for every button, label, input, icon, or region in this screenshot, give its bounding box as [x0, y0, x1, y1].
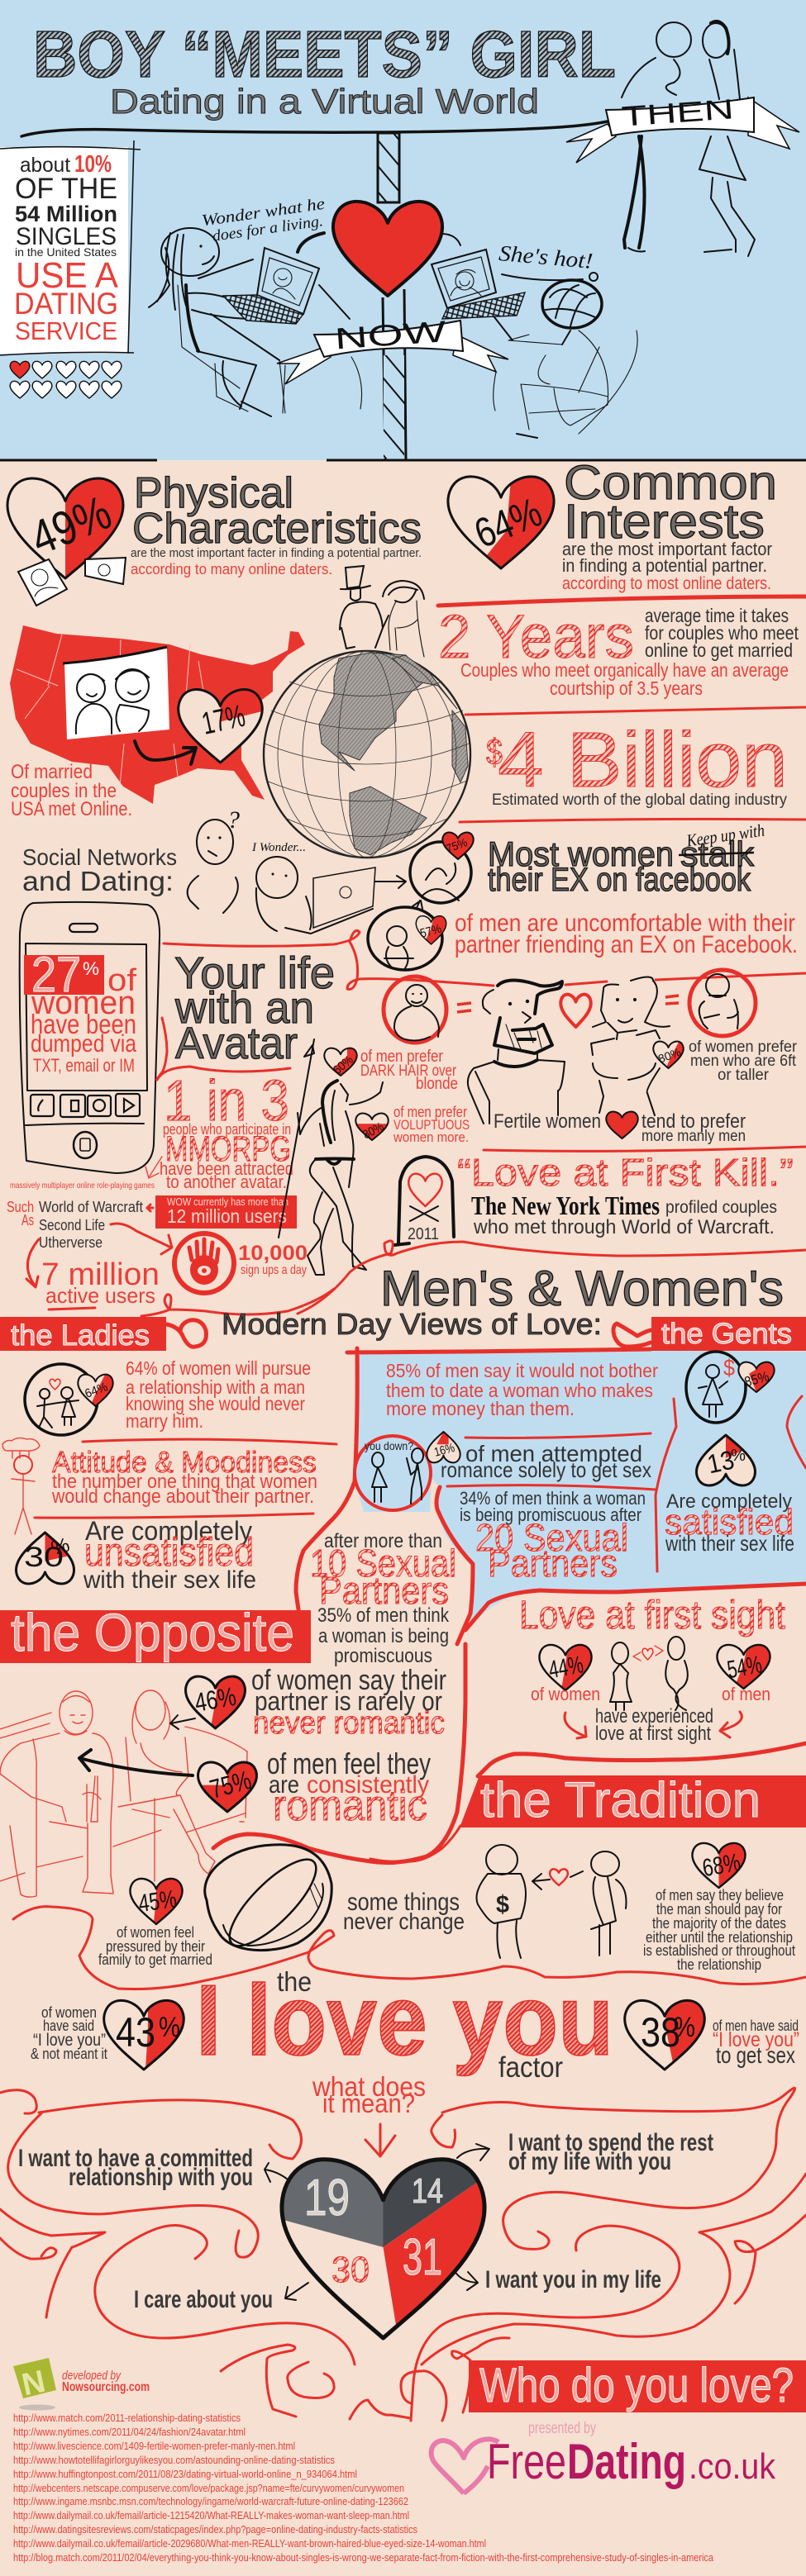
photo: couple [63, 647, 169, 739]
stat: 43 percent women said I love you: 43 [116, 2009, 155, 2056]
stat: 45 percent family pressure: pressured by their [106, 1938, 205, 1955]
stat: 27 percent dumped: TXT, email or IM [33, 1055, 135, 1076]
heading: your life with an avatar: Avatar [175, 1019, 298, 1068]
stat: 43 percent women said I love you [31, 1996, 193, 2070]
panel: header blue sky [0, 0, 806, 460]
stat: 1 in 3 MMORPG: 1 in 3 [164, 1068, 289, 1133]
panel: gents blue area [355, 1350, 806, 1628]
stat: women unsatisfied 30 percent: unsatisfied [84, 1531, 254, 1575]
illustration: bearded man [468, 980, 565, 1124]
illustration: warrior avatar woman [279, 1039, 383, 1275]
list: virtual worlds: Such [7, 1199, 34, 1215]
stat: 75 percent consistently romantic: are [269, 1771, 299, 1799]
banner: NOW: NOW [333, 314, 447, 355]
stat: men date richer women [386, 1360, 658, 1419]
stat: 46 percent never romantic: 46% [193, 1681, 238, 1718]
stat: 1 in 3 MMORPG [10, 1068, 293, 1192]
text: married couples: couples in the [11, 780, 117, 802]
stat: 80 percent voluptuous: of men prefer [393, 1104, 467, 1120]
stat: 27 percent dumped: 27 [31, 947, 81, 1002]
list: virtual worlds: World of Warcraft [39, 1199, 143, 1215]
logo: Nowsourcing: developed by [62, 2369, 122, 2383]
chart: what I love you means heart: 14 [412, 2171, 443, 2210]
text: fertile women [494, 1110, 746, 1145]
stat: 10 sexual partners: a woman is being [318, 1625, 449, 1647]
list: sources: http://webcenters.netscape.compuserve.com/love/package.jsp?name=fte/curvywomen/curvywomen [13, 2482, 404, 2494]
stat: common interests 64 percent heart [446, 475, 556, 570]
panel: 10 percent stat: OF THE [15, 173, 117, 205]
decorative curves [213, 1644, 465, 1863]
text: attempted romance [441, 1441, 651, 1482]
subtitle: Dating in a Virtual World [110, 82, 539, 121]
headline: love at first kill: “Love at First Kill.” [457, 1151, 794, 1194]
arrow: second life to hand [111, 1224, 172, 1254]
text: attempted romance: of men attempted [465, 1441, 642, 1466]
section: love at first sight: have experienced [595, 1705, 713, 1728]
logo: FreeDating.co.uk [432, 2420, 776, 2493]
stat: 27 percent dumped [24, 947, 136, 1076]
stat: 1 in 3 MMORPG: have been attracted [160, 1158, 293, 1179]
title: BOY “MEETS” GIRL [33, 17, 616, 91]
stat: 27 percent dumped: dumped via [31, 1030, 136, 1057]
stat: women unsatisfied 30 percent: with their sex life [83, 1566, 256, 1594]
stat: women unsatisfied 30 percent [15, 1520, 255, 1588]
arrow: down to heart [365, 2124, 395, 2156]
chart: what I love you means heart: 31 [403, 2229, 442, 2286]
heading: the I love you factor: the [277, 1966, 312, 1997]
icon: second life hand [174, 1233, 234, 1293]
text: new york times [471, 1191, 777, 1238]
panel: 10 percent stat: about [20, 154, 70, 177]
heading: physical characteristics: are the most important facter in finding a potential partner. [131, 547, 422, 560]
logo: FreeDating.co.uk: Free [487, 2434, 566, 2489]
panel: 10 percent stat: USE A [16, 255, 119, 296]
stat: 46 percent never romantic: of women say their [251, 1665, 446, 1696]
stat: 10 sexual partners: Partners [319, 1569, 449, 1612]
illustration: man pays woman [476, 1845, 627, 1958]
text: married couples [11, 761, 132, 820]
icon: photo and video tiles [18, 558, 126, 606]
label: want you in my life: I want you in my life [485, 2266, 661, 2293]
stat: 20 sexual partners: 20 Sexual [475, 1516, 628, 1559]
decorative flourishes [0, 2088, 806, 2421]
stat: 2 years: 2 Years [438, 602, 634, 671]
text: most women keep up with: stalk [680, 834, 755, 873]
stat: 80 percent 6ft men: of women prefer [689, 1038, 798, 1056]
stat: common interests 64 percent heart: 64% [468, 488, 548, 557]
heading: your life with an avatar [174, 948, 335, 1068]
stat: 38 percent men said I love you [625, 1996, 799, 2070]
list: sources: http://www.datingsitesreviews.com/staticpages/index.php?page=online-dating-industry-facts-statistics [13, 2523, 417, 2536]
illustration: woman at laptop [149, 228, 350, 416]
stat: 75 percent consistently romantic: 75% [207, 1765, 255, 1804]
icon: 85 percent circle with woman and dollar: $ [723, 1355, 735, 1381]
heading: what does it mean: it mean? [322, 2089, 415, 2118]
icon: ten hearts, one filled [10, 361, 122, 398]
stat: 45 percent family pressure: 45% [137, 1885, 179, 1918]
callout: WOW users [147, 1195, 297, 1229]
stat: 27 percent dumped: % [83, 958, 99, 979]
heading: social networks: and Dating: [22, 866, 174, 896]
stat: men satisfied 13 percent: 13 [704, 1445, 737, 1479]
text: fertile women: more manly men [641, 1128, 746, 1145]
banner: the tradition: the Tradition [480, 1772, 761, 1827]
stat: 1 in 3 MMORPG: MMORPG [165, 1129, 291, 1169]
heading: physical characteristics: Characteristics [132, 505, 422, 553]
logo: FreeDating.co.uk: .co.uk [689, 2446, 776, 2487]
icon: wedding ring [205, 1845, 331, 1957]
stat: 80 percent voluptuous [355, 1105, 470, 1142]
icon: 85 percent circle with woman and dollar [686, 1352, 778, 1423]
stat: 80 percent voluptuous: women more. [393, 1129, 469, 1145]
list: sources: http://www.huffingtonpost.com/2011/08/23/dating-virtual-world-online_n_934064.html [13, 2468, 357, 2480]
stat: 43 percent women said I love you: “I love you” [33, 2031, 106, 2050]
banner: THEN: THEN [621, 93, 735, 133]
panel: 10 percent stat [0, 140, 141, 355]
stat: physical characteristics 49 percent heart [7, 475, 129, 580]
heading: common interests: are the most important factor [562, 539, 772, 559]
arrow: photo to heart [135, 741, 196, 764]
stat: attitude and moodiness [2, 1438, 317, 1534]
list: sources: http://www.match.com/2011-relationship-dating-statistics [13, 2412, 241, 2424]
stat: men date richer women: them to date a woman who makes [386, 1380, 653, 1401]
stat: 80 percent voluptuous: VOLUPTUOUS [393, 1117, 470, 1133]
stat: 10 sexual partners: 10 Sexual [310, 1542, 456, 1585]
banner: the gents: the Gents [661, 1318, 792, 1350]
icon: heart between man and woman [560, 995, 591, 1027]
heading: physical characteristics: Physical [134, 469, 293, 517]
stat: 38 percent men said I love you: % [674, 2012, 695, 2043]
stat: 4 billion: 4 Billion [498, 716, 788, 804]
stat: 46 percent never romantic [169, 1669, 446, 1734]
section: love at first sight [519, 1594, 785, 1745]
stat: 80 percent 6ft men [652, 1040, 797, 1080]
stat: 27 percent dumped: of [107, 963, 136, 998]
heading: the I love you factor: factor [498, 2051, 563, 2084]
stat: 10 sexual partners [310, 1530, 456, 1667]
icon: 57 percent man circle [368, 907, 450, 970]
heading: men's and women's: Men's & Women's [380, 1261, 784, 1316]
heading: the I love you factor: I love you [196, 1964, 613, 2076]
icon: curvy woman circle [689, 970, 756, 1036]
chart: what I love you means heart: 30 [331, 2250, 370, 2290]
stat: 1 in 3 MMORPG: to another avatar. [166, 1172, 287, 1192]
stat: 68 percent man should pay [643, 1840, 795, 1973]
text: fertile women: tend to prefer [641, 1110, 746, 1133]
text: fertile women: Fertile women [494, 1110, 601, 1133]
stat: 1 in 3 MMORPG: massively multiplayer online role-playing games [10, 1181, 155, 1191]
stat: women pursue 64 percent: marry him. [126, 1410, 203, 1432]
divider rope [21, 121, 608, 136]
icon: gravestone 2011: 2011 [408, 1225, 439, 1243]
section: love at first sight: love at first sight [595, 1723, 711, 1745]
heading: common interests: Common [564, 456, 777, 510]
label: rest of my life: I want to spend the rest [508, 2129, 713, 2156]
banner: THEN [566, 93, 799, 163]
heading: your life with an avatar: Your life [174, 948, 335, 998]
illustration: couple on couch [0, 1690, 247, 1897]
list: sources: http://www.nytimes.com/2011/04/24/fashion/24avatar.html [13, 2426, 246, 2438]
stat: 68 percent man should pay: the man should pay for [656, 1901, 782, 1918]
text: some things never change: some things [347, 1889, 460, 1916]
stat: 43 percent women said I love you: % [159, 2012, 180, 2043]
stat: women unsatisfied 30 percent: 30 [24, 1542, 64, 1573]
stat: 68 percent man should pay: the relationship [677, 1956, 761, 1973]
logo: Nowsourcing: Nowsourcing.com [62, 2380, 150, 2394]
label: rest of my life [457, 2129, 713, 2175]
stat: 80 percent 6ft men: or taller [718, 1067, 770, 1084]
stat: women pursue 64 percent: 64% [83, 1380, 110, 1401]
stat: women pursue 64 percent: a relationship with a man [126, 1376, 305, 1398]
panel: 10 percent stat: SERVICE [15, 316, 117, 345]
stat: attitude and moodiness: the number one thing that women [52, 1471, 317, 1493]
stat: 75 percent consistently romantic: of men feel they [267, 1747, 431, 1780]
list: virtual worlds [7, 1199, 143, 1251]
stat: 4 billion: $ [486, 732, 503, 772]
heading: social networks [22, 844, 177, 896]
label: care about you: I care about you [134, 2286, 273, 2313]
list: sources: http://www.dailymail.co.uk/femail/article-1215420/What-REALLY-makes-woman-want-sleep-man.html [13, 2509, 409, 2521]
panel: 10 percent stat: in the United States [15, 245, 117, 259]
icon: big red heart [298, 202, 460, 296]
text: new york times: The New York Times [471, 1191, 660, 1220]
arrow: MMORPG definition [145, 1157, 162, 1178]
section: love at first sight: of women [531, 1684, 600, 1704]
icon: you down circle [355, 1430, 460, 1510]
banner: the opposite: the Opposite [11, 1603, 294, 1662]
stat: 46 percent never romantic: never romantic [253, 1706, 445, 1741]
text: most women keep up with: Most women [488, 834, 674, 873]
stat: 46 percent never romantic: partner is rarely or [255, 1686, 442, 1716]
stat: women pursue 64 percent: knowing she would never [126, 1393, 305, 1414]
icon: you down circle: you down? [365, 1439, 413, 1452]
stat: 60 percent dark hair: 60% [331, 1053, 356, 1077]
illustration: then couple [622, 21, 755, 256]
stat: 75 percent consistently romantic [78, 1748, 431, 1821]
list: virtual worlds: As [21, 1212, 34, 1229]
text: some things never change: never change [343, 1908, 465, 1934]
stat: 10 sexual partners: 35% of men think [317, 1604, 450, 1627]
list: virtual worlds: Utherverse [39, 1234, 103, 1251]
stat: physical characteristics 49 percent heart: 49% [23, 485, 119, 565]
callout: WOW users: WOW currently has more than [167, 1195, 289, 1208]
text: married couples: Of married [11, 761, 93, 783]
stat: men date richer women: 85% of men say it would not bother [386, 1360, 658, 1381]
logo: FreeDating.co.uk: Dating [567, 2434, 686, 2489]
illustration: globe [264, 651, 470, 858]
stat: 10000 signups: sign ups a day [241, 1263, 307, 1277]
map: USA [10, 625, 305, 804]
list: sources: http://www.ingame.msnbc.msn.com/technology/ingame/world-warcraft-future-online-dating-123662 [13, 2495, 408, 2507]
stat: 17 percent heart [179, 684, 271, 763]
panel: 10 percent stat: DATING [14, 287, 118, 321]
text: new york times: profiled couples [665, 1198, 777, 1217]
illustration: wondering person with laptop: I Wonder... [251, 841, 306, 854]
text: some things never change [343, 1889, 465, 1934]
decorative gents outline [296, 1348, 651, 1609]
panel: 10 percent stat: 10% [74, 151, 112, 178]
stat: 1 in 3 MMORPG: people who participate in [163, 1121, 291, 1138]
heading: your life with an avatar: with an [174, 983, 314, 1033]
speech: woman thought: Wonder what he [201, 195, 326, 230]
heading: physical characteristics: according to many online daters. [131, 561, 332, 577]
logo: FreeDating.co.uk: presented by [528, 2420, 596, 2437]
stat: 10000 signups [238, 1242, 308, 1277]
icon: you down circle: 16% [432, 1441, 456, 1460]
list: sources [13, 2412, 714, 2564]
label: committed relationship: relationship with you [69, 2164, 253, 2191]
stat: 10 sexual partners: after more than [324, 1530, 442, 1552]
stat: 27 percent dumped: have been [31, 1009, 136, 1039]
label: want you in my life [455, 2266, 661, 2293]
logo: Nowsourcing [13, 2358, 150, 2411]
list: sources: http://www.howtotellifagirlorguylikesyou.com/astounding-online-dating-statistics [13, 2454, 335, 2466]
illustration: wondering person with laptop [251, 841, 422, 934]
pole [378, 133, 406, 460]
stat: men satisfied 13 percent: satisfied [665, 1502, 794, 1542]
banner: the gents [613, 1317, 806, 1351]
illustration: confused man [188, 806, 240, 913]
stat: 60 percent dark hair: DARK HAIR over [360, 1062, 457, 1080]
heading: common interests: according to most online daters. [562, 574, 771, 593]
stat: women unsatisfied 30 percent: Are completely [85, 1516, 252, 1546]
icon: 75 percent stalker circle: 75% [444, 835, 469, 855]
stat: 7 million [26, 1239, 160, 1309]
stat: women pursue 64 percent: 64% of women will pursue [126, 1357, 311, 1379]
heading: what does it mean: what does [312, 2071, 426, 2102]
stat: women pursue 64 percent [25, 1357, 311, 1435]
speech: man thought: She's hot! [498, 240, 594, 273]
stat: 20 sexual partners: is being promiscuous after [460, 1504, 641, 1525]
heading: physical characteristics [131, 469, 422, 577]
heading: social networks: Social Networks [22, 844, 177, 870]
stat: 68 percent man should pay: 68% [700, 1849, 742, 1882]
text: men uncomfortable [455, 910, 798, 958]
heading: modern day views of love: Modern Day Views of Love: [222, 1307, 602, 1341]
text: attempted romance: romance solely to get sex [441, 1457, 651, 1482]
stat: 43 percent women said I love you: have said [43, 2018, 94, 2034]
chart: what I love you means heart [279, 2157, 487, 2341]
stat: 7 million: 7 million [41, 1257, 160, 1292]
list: sources: http://www.livescience.com/1409-fertile-women-prefer-manly-men.html [13, 2440, 295, 2452]
stat: men satisfied 13 percent: % [731, 1447, 746, 1465]
banner: the ladies [0, 1317, 206, 1352]
label: rest of my life: of my life with you [508, 2148, 671, 2175]
section: love at first sight: 54% [725, 1651, 764, 1684]
speech: woman thought: does for a living. [211, 212, 324, 245]
stat: 60 percent dark hair: blonde [416, 1075, 458, 1093]
icon: phone [20, 902, 160, 1173]
stat: 2 years: courtship of 3.5 years [550, 677, 703, 699]
stat: 45 percent family pressure: family to get married [98, 1951, 212, 1968]
stat: 4 billion: Estimated worth of the global dating industry [492, 791, 787, 809]
heading: common interests: in finding a potential partner. [562, 555, 767, 576]
stat: attitude and moodiness: Attitude & Moodiness [52, 1445, 317, 1479]
list: virtual worlds: Second Life [39, 1217, 105, 1233]
banner: NOW [277, 314, 508, 413]
stat: 10 sexual partners: promiscuous [334, 1645, 432, 1667]
callout: WOW users: 12 million users [167, 1205, 287, 1227]
stat: attitude and moodiness: would change about their partner. [51, 1485, 314, 1508]
text: most women keep up with [488, 820, 765, 898]
heading: what does it mean [312, 2071, 426, 2118]
stat: 75 percent consistently romantic: romantic [273, 1782, 427, 1830]
stat: 60 percent dark hair: of men prefer [360, 1048, 443, 1066]
text: married couples: USA met Online. [11, 798, 132, 820]
panel: 10 percent stat: SINGLES [16, 223, 117, 250]
stat: men date richer women: more money than them. [386, 1398, 575, 1419]
illustration: woman [591, 977, 679, 1115]
illustration: man at laptop [432, 250, 637, 438]
section: love at first sight: 44% [546, 1651, 585, 1684]
list: sources: http://www.dailymail.co.uk/femail/article-2029680/What-men-REALLY-want-brown-haired-blue-eyed-size-14-woman.html [13, 2537, 486, 2550]
stat: 10000 signups: 10,000 [238, 1242, 308, 1265]
logo: Nowsourcing: N [19, 2365, 48, 2403]
text: most women keep up with: Keep up with [684, 820, 765, 851]
stat: 38 percent men said I love you: 38 [641, 2009, 680, 2056]
icon: 75 percent stalker circle [410, 833, 474, 903]
stat: 80 percent 6ft men: 80% [656, 1045, 683, 1066]
stat: 20 sexual partners: 34% of men think a woman [460, 1488, 646, 1509]
stat: 17 percent heart: 17% [199, 699, 248, 742]
stat: 75 percent consistently romantic: consistently [307, 1771, 429, 1799]
icon: 57 percent man circle: 57% [418, 922, 443, 941]
chart: what I love you means heart: 19 [304, 2170, 350, 2227]
stat: 43 percent women said I love you: & not meant it [31, 2046, 107, 2062]
label: committed relationship [18, 2145, 288, 2191]
text: most women keep up with: their EX on facebook [488, 862, 751, 898]
stat: 60 percent dark hair [323, 1048, 458, 1089]
illustration: confused man: ? [227, 806, 240, 834]
label: committed relationship: I want to have a committed [18, 2145, 253, 2172]
heading: common interests: Interests [564, 495, 765, 549]
stat: 45 percent family pressure: of women feel [117, 1924, 194, 1941]
banner: the ladies: the Ladies [11, 1319, 150, 1352]
heading: common interests [562, 456, 777, 593]
stat: 80 percent voluptuous: 80% [360, 1119, 386, 1142]
text: new york times: who met through World of Warcraft. [473, 1216, 775, 1238]
stat: men satisfied 13 percent [665, 1433, 794, 1556]
stat: 2 years [438, 602, 799, 699]
stat: 20 sexual partners [460, 1488, 646, 1585]
icon: chubby man circle [384, 977, 471, 1043]
panel: 10 percent stat: 54 Million [15, 202, 117, 226]
stat: 20 sexual partners: Partners [488, 1542, 618, 1585]
illustration: man pays woman: $ [496, 1891, 509, 1918]
stat: women unsatisfied 30 percent: % [49, 1533, 72, 1560]
icon: 85 percent circle with woman and dollar: 85% [742, 1368, 770, 1390]
stat: men satisfied 13 percent: Are completely [666, 1490, 792, 1513]
stat: 7 million: active users [45, 1283, 155, 1308]
speech: woman thought [201, 195, 328, 246]
illustration: bride and groom [340, 566, 424, 657]
section: love at first sight: of men [722, 1684, 770, 1704]
stat: 27 percent dumped: women [31, 985, 136, 1021]
stat: 43 percent women said I love you: of women [41, 2004, 97, 2021]
icon: gravestone 2011 [394, 1157, 454, 1245]
stat: 80 percent 6ft men: men who are 6ft [690, 1053, 797, 1070]
stat: 45 percent family pressure [98, 1875, 212, 1968]
